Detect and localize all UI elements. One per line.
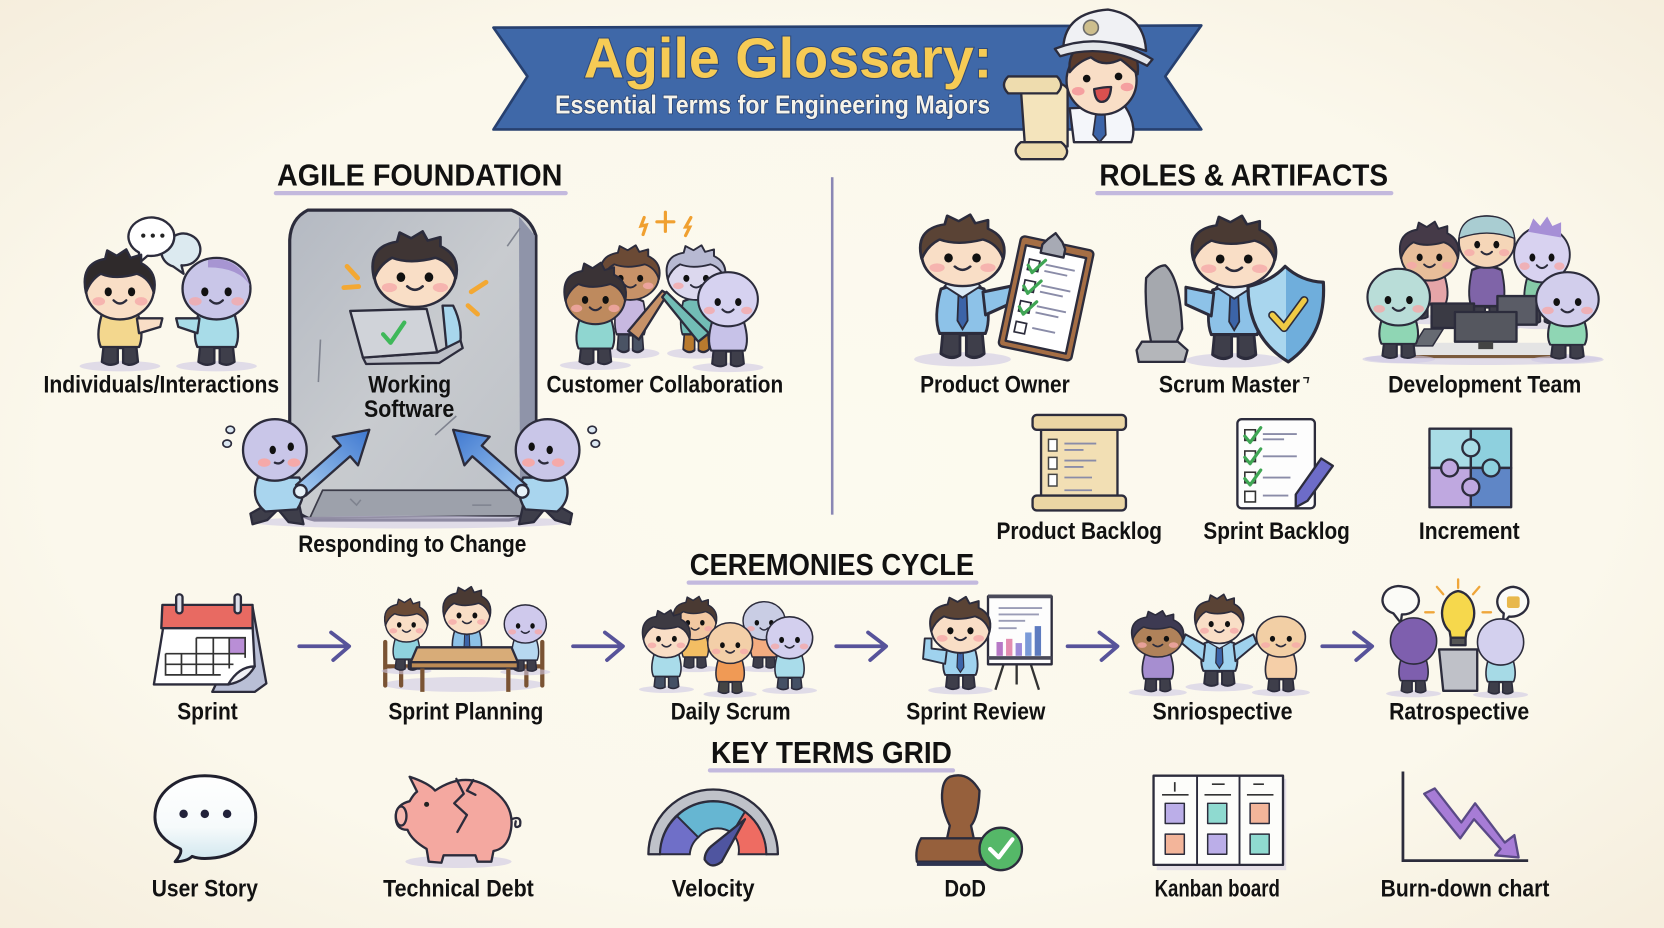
icon: burn-down chart	[1403, 771, 1528, 861]
label: Increment	[1419, 518, 1520, 545]
panel: velocity	[648, 790, 778, 903]
icon: sparkles	[641, 212, 691, 236]
section divider	[831, 177, 833, 515]
label: Development Team	[1388, 372, 1581, 399]
panel: sprint	[154, 594, 266, 725]
label: Sprint Planning	[388, 698, 543, 725]
panel: customer collaboration	[547, 212, 783, 399]
person: back	[670, 596, 720, 672]
arrow	[1068, 632, 1117, 660]
label: Burn-down chart	[1381, 876, 1549, 903]
heading: ceremonies cycle: CEREMONIES CYCLE	[690, 547, 974, 582]
panel: user story	[152, 776, 259, 903]
label: Individuals/Interactions	[44, 372, 279, 399]
label: Scrum Master	[1159, 372, 1300, 399]
person: front	[704, 623, 757, 698]
panel: development team	[1362, 216, 1604, 399]
label: Customer Collaboration	[547, 372, 783, 399]
panel: retrospective	[1383, 579, 1529, 725]
person: front left	[560, 263, 631, 370]
person: purple	[1386, 618, 1441, 697]
scroll	[1004, 76, 1068, 159]
heading: key terms grid: KEY TERMS GRID	[711, 735, 952, 770]
person pushing left with arrow	[223, 419, 369, 524]
panel: increment	[1419, 429, 1520, 545]
stone tablet	[290, 210, 536, 520]
person: right	[1252, 616, 1310, 696]
person: centre	[1182, 594, 1257, 691]
person: left teal	[1362, 269, 1435, 363]
panel: technical debt	[383, 777, 534, 903]
icon: scroll	[1033, 415, 1126, 510]
panel: kanban board	[1154, 776, 1286, 903]
panel: stone tablet working software	[290, 210, 536, 520]
person: talker right	[176, 258, 257, 371]
panel: daily scrum	[639, 596, 817, 725]
arrow	[299, 632, 349, 660]
person: master	[1186, 216, 1283, 367]
title banner	[493, 10, 1201, 159]
icon: idea bubble	[1497, 587, 1528, 624]
panel: product owner	[914, 215, 1096, 399]
icon: laptop	[350, 309, 463, 364]
icon: sparks	[344, 266, 486, 314]
person: talker left	[80, 249, 162, 371]
panel: product backlog	[996, 415, 1162, 545]
person: blob	[1473, 619, 1528, 698]
person: back brown	[601, 245, 660, 359]
label: Kanban board	[1155, 876, 1280, 903]
icon: shield	[1248, 266, 1324, 362]
icon: piggy bank	[396, 777, 520, 868]
person: dark haired	[1396, 222, 1463, 324]
label: Product Backlog	[996, 518, 1162, 545]
icon: stamp	[916, 775, 1022, 870]
panel: sprint review	[906, 596, 1052, 725]
label: DoD	[944, 876, 986, 903]
person: front right	[693, 272, 763, 372]
person: coder	[373, 231, 461, 350]
panel: snriospective	[1129, 594, 1310, 725]
person: left	[1129, 611, 1187, 696]
icon: presentation board	[988, 596, 1052, 690]
icon: clipboard	[998, 226, 1096, 361]
panel: sprint planning	[381, 587, 550, 725]
icon: calendar	[154, 594, 266, 692]
heading: roles and artifacts: ROLES & ARTIFACTS	[1099, 158, 1388, 193]
desk and monitors	[1365, 296, 1602, 365]
label: User Story	[152, 876, 259, 903]
arrow	[836, 632, 886, 660]
icon: gauge	[648, 790, 778, 865]
subtitle: Essential Terms for Engineering Majors	[555, 90, 990, 120]
podium	[1439, 649, 1477, 691]
icon: checklist	[1237, 419, 1315, 508]
chairs	[385, 642, 542, 686]
label: Sprint	[177, 698, 238, 725]
arrow	[573, 632, 623, 660]
table	[411, 647, 518, 692]
person: left	[639, 610, 694, 693]
person: back grey	[667, 245, 725, 359]
high five arms	[628, 291, 668, 340]
label: Working	[368, 372, 451, 399]
label: Sprint Review	[906, 698, 1046, 725]
icon: speech bubble	[155, 776, 256, 862]
person: presenter	[923, 597, 993, 694]
heading: agile foundation: AGILE FOUNDATION	[277, 158, 562, 193]
person: back right	[739, 602, 789, 672]
label: Responding to Change	[298, 531, 526, 558]
icon: light bulb	[1425, 579, 1491, 645]
icon: thought bubbles	[1383, 586, 1419, 623]
person: owner	[914, 215, 1011, 366]
label: Sprint Backlog	[1203, 518, 1350, 545]
person: centre	[440, 587, 494, 670]
title: Agile Glossary:	[584, 26, 992, 89]
person: right	[500, 605, 550, 675]
label: Ratrospective	[1389, 698, 1529, 725]
panel: scrum master	[1137, 216, 1324, 399]
person: top	[1454, 216, 1520, 333]
icon: speech bubbles	[128, 217, 200, 274]
person: right	[762, 617, 817, 694]
label: Product Owner	[920, 372, 1070, 399]
icon: pen	[1296, 458, 1333, 507]
panel: responding to change	[223, 419, 600, 558]
panel: burn-down chart	[1381, 771, 1549, 903]
panel: DoD	[916, 775, 1022, 903]
icon: rock pillar	[1137, 265, 1188, 362]
panel: sprint backlog	[1203, 419, 1350, 545]
label: Technical Debt	[383, 876, 534, 903]
person: right purple	[1531, 272, 1604, 364]
icon: puzzle	[1429, 429, 1511, 507]
person pushing right with arrow	[453, 419, 600, 524]
label: Software	[364, 396, 454, 423]
person: purple spiky	[1509, 216, 1575, 329]
label: Velocity	[672, 876, 755, 903]
label: Daily Scrum	[671, 698, 791, 725]
engineer mascot	[1055, 10, 1152, 142]
person: left	[381, 599, 431, 674]
panel: individuals and interactions	[44, 217, 279, 399]
label: Snriospective	[1152, 698, 1293, 725]
icon: kanban	[1154, 776, 1286, 870]
banner ribbon	[493, 25, 1201, 129]
arrow	[1322, 632, 1372, 660]
